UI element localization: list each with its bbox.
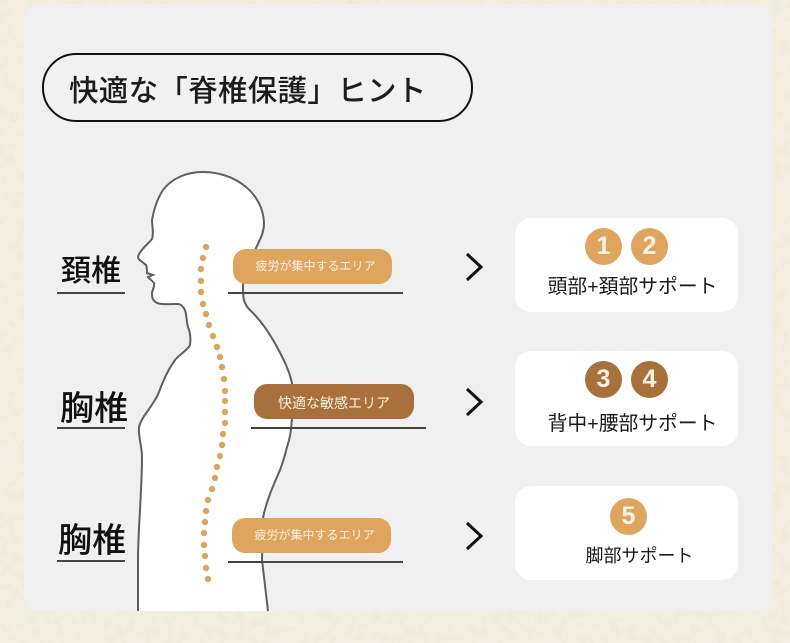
number 2: 2 bbox=[643, 232, 656, 260]
callout: fatigue area upper: 疲労が集中するエリア bbox=[255, 259, 376, 273]
arrow 1 bbox=[466, 252, 484, 282]
panel: head and neck support bbox=[515, 218, 738, 312]
number 1 bbox=[585, 228, 622, 265]
number 5: 5 bbox=[622, 502, 635, 530]
number 3 bbox=[585, 361, 622, 398]
number 1: 1 bbox=[597, 232, 610, 260]
panel: back and waist support bbox=[515, 351, 738, 446]
callout: sensitive area: 快適な敏感エリア bbox=[278, 395, 390, 411]
panel: leg support bbox=[515, 486, 738, 580]
label: cervical: 頚椎 bbox=[61, 255, 121, 288]
number 5 bbox=[610, 498, 647, 535]
callout: fatigue area upper bbox=[233, 249, 392, 284]
title: 快適な「脊椎保護」ヒント bbox=[69, 75, 427, 108]
callout: fatigue area lower bbox=[232, 518, 391, 553]
number 4 bbox=[631, 361, 668, 398]
caption: 頭部+頚部サポート bbox=[548, 276, 717, 298]
caption: 脚部サポート bbox=[586, 546, 694, 566]
caption: 背中+腰部サポート bbox=[548, 413, 717, 435]
callout: fatigue area lower: 疲労が集中するエリア bbox=[254, 528, 374, 542]
label: thoracic lower: 胸椎 bbox=[58, 522, 126, 560]
title bbox=[42, 53, 473, 122]
number 2 bbox=[631, 228, 668, 265]
label: thoracic: 胸椎 bbox=[60, 390, 128, 428]
number 3: 3 bbox=[597, 365, 610, 393]
number 4: 4 bbox=[643, 365, 656, 393]
arrow 3 bbox=[466, 522, 484, 550]
spine dots bbox=[198, 244, 228, 582]
body silhouette bbox=[138, 172, 292, 611]
callout: sensitive area bbox=[254, 384, 414, 419]
arrow 2 bbox=[466, 388, 484, 416]
